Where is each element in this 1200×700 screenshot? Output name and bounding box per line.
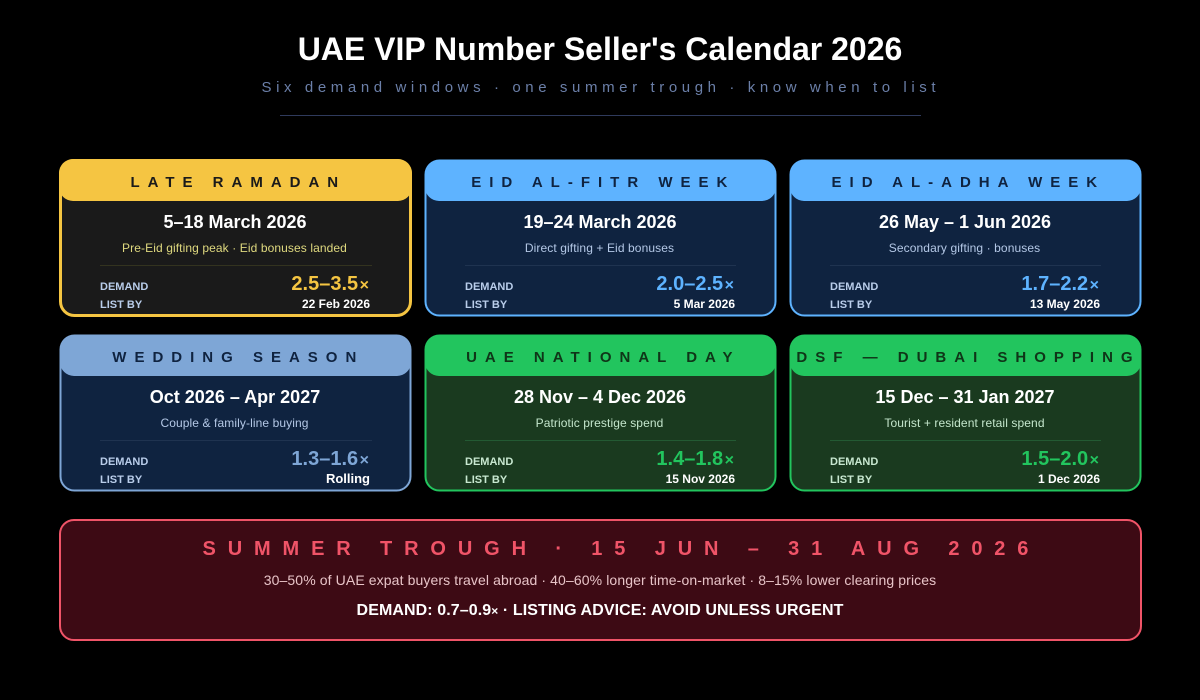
demand: DSF: DEMAND: [830, 456, 878, 468]
date: Wedding Season: Oct 2026 – Apr 2027: [150, 387, 320, 407]
description: DSF: Tourist + resident retail spend: [884, 416, 1045, 430]
date: Eid Al-Adha: 26 May – 1 Jun 2026: [879, 212, 1051, 232]
date: Late Ramadan: 5–18 March 2026: [163, 212, 307, 232]
demand: Eid Al-Fitr: 2.0–2.5×: [656, 273, 734, 295]
description: Eid Al-Fitr: Direct gifting + Eid bonuses: [525, 241, 674, 255]
list by: Eid Al-Fitr: 5 Mar 2026: [674, 297, 735, 311]
header: National Day: UAE NATIONAL DAY: [466, 349, 741, 366]
title: UAE VIP Number Seller's Calendar 2026: [298, 31, 902, 67]
list by: DSF: LIST BY: [830, 474, 873, 486]
header: DSF: [790, 335, 1141, 376]
list by: National Day: [465, 472, 735, 486]
demand: Eid Al-Fitr: DEMAND: [465, 281, 513, 293]
description: Late Ramadan: Pre-Eid gifting peak · Eid bonuses landed: [122, 241, 347, 255]
list by: Eid Al-Adha: [830, 297, 1100, 311]
panel: Summer Trough: [60, 520, 1141, 640]
list by: Eid Al-Fitr: [465, 297, 735, 311]
demand: Late Ramadan: [100, 273, 369, 295]
list by: Eid Al-Adha: 13 May 2026: [1030, 297, 1100, 311]
header: Wedding Season: WEDDING SEASON: [112, 349, 364, 366]
list by: Wedding Season: Rolling: [326, 471, 370, 486]
list by: DSF: [830, 472, 1100, 486]
panel: DSF Dubai Shopping: [790, 335, 1141, 490]
panel: UAE National Day: [425, 335, 776, 490]
demand: DSF: [830, 448, 1099, 470]
demand: Eid Al-Adha: 1.7–2.2×: [1021, 273, 1099, 295]
demand: National Day: [465, 448, 734, 470]
demand: National Day: 1.4–1.8×: [656, 448, 734, 470]
header: Late Ramadan: [59, 159, 412, 201]
demand: National Day: DEMAND: [465, 456, 513, 468]
date: Eid Al-Fitr: 19–24 March 2026: [523, 212, 677, 232]
subtitle: Six demand windows · one summer trough · know when to list: [262, 79, 940, 96]
description: National Day: Patriotic prestige spend: [536, 416, 663, 430]
demand: Eid Al-Fitr: [465, 273, 734, 295]
demand: DSF: 1.5–2.0×: [1021, 448, 1099, 470]
list by: Wedding Season: LIST BY: [100, 474, 143, 486]
demand: Wedding Season: 1.3–1.6×: [291, 448, 369, 470]
list by: Eid Al-Fitr: LIST BY: [465, 299, 508, 311]
demand: Wedding Season: [100, 448, 369, 470]
list by: Late Ramadan: [100, 297, 370, 311]
panel: Wedding Season: [60, 335, 411, 490]
panel: Eid Al-Fitr Week: [425, 160, 776, 316]
description: Wedding Season: Couple & family-line buying: [160, 416, 309, 430]
demand: Eid Al-Adha: [830, 273, 1099, 295]
summer advice: DEMAND: 0.7–0.9× · LISTING ADVICE: AVOID UNLESS URGENT: [357, 602, 844, 619]
list by: Late Ramadan: LIST BY: [100, 299, 143, 311]
date: DSF: 15 Dec – 31 Jan 2027: [875, 387, 1055, 407]
header: National Day: [425, 335, 776, 376]
list by: Eid Al-Adha: LIST BY: [830, 299, 873, 311]
summer heading: SUMMER TROUGH · 15 JUN – 31 AUG 2026: [202, 538, 1040, 560]
header: DSF: DSF — DUBAI SHOPPING: [796, 349, 1141, 366]
demand: Eid Al-Adha: DEMAND: [830, 281, 878, 293]
panel: Eid Al-Adha Week: [790, 160, 1141, 316]
header: Wedding Season: [60, 335, 411, 376]
header: Eid Al-Adha: [790, 160, 1141, 201]
header: Eid Al-Adha: EID AL-ADHA WEEK: [832, 174, 1105, 191]
header: Eid Al-Fitr: [425, 160, 776, 201]
list by: National Day: LIST BY: [465, 474, 508, 486]
description: Eid Al-Adha: Secondary gifting · bonuses: [889, 241, 1040, 255]
header: Eid Al-Fitr: EID AL-FITR WEEK: [471, 174, 735, 191]
list by: National Day: 15 Nov 2026: [666, 472, 735, 486]
panel: Late Ramadan: [59, 159, 412, 316]
list by: Late Ramadan: 22 Feb 2026: [302, 297, 370, 311]
demand: Wedding Season: DEMAND: [100, 456, 148, 468]
demand: Late Ramadan: DEMAND: [100, 281, 148, 293]
date: National Day: 28 Nov – 4 Dec 2026: [514, 387, 686, 407]
header: Late Ramadan: LATE RAMADAN: [130, 174, 346, 191]
demand: Late Ramadan: 2.5–3.5×: [291, 273, 369, 295]
list by: Wedding Season: [100, 471, 370, 486]
summer description: 30–50% of UAE expat buyers travel abroad · 40–60% longer time-on-market · 8–15% lower clearing prices: [264, 572, 936, 588]
list by: DSF: 1 Dec 2026: [1038, 472, 1100, 486]
